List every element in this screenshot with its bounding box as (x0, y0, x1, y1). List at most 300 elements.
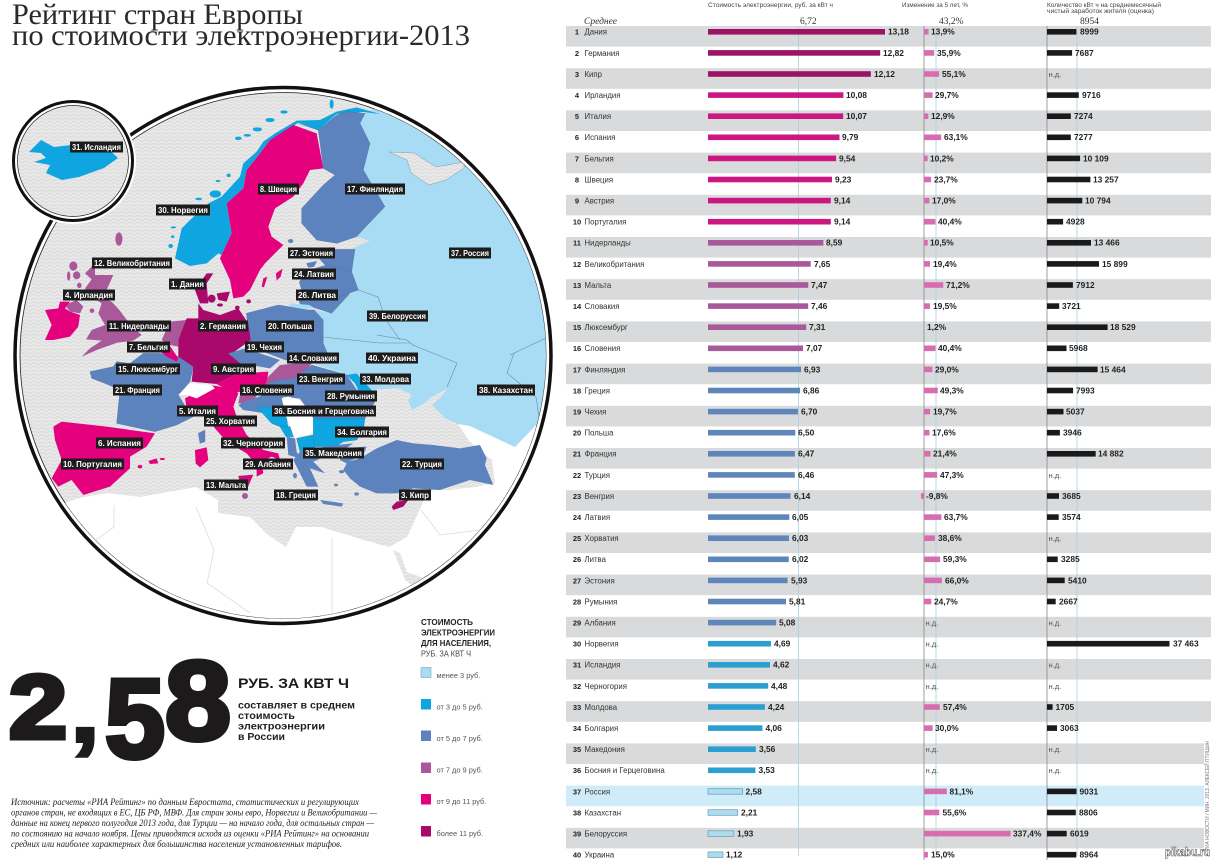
label: 33. Молдова (362, 374, 409, 384)
row 40: 15,0% (931, 850, 955, 860)
row 17: 29,0% (935, 364, 959, 374)
row 30: н.д. (926, 640, 938, 649)
row 17 (573, 364, 1126, 374)
row 38: 38 (573, 808, 581, 817)
row 25: н.д. (1048, 534, 1061, 543)
row 23 (573, 491, 1081, 501)
row 23: 6,14 (794, 491, 811, 501)
row 21 (573, 449, 1124, 459)
legend item: от 5 до 7 руб. (436, 734, 483, 743)
row 20: Польша (584, 429, 614, 438)
row 14: 14 (573, 302, 582, 311)
label: 29. Албания (245, 459, 291, 469)
table header: Изменение за 5 лет, % (902, 2, 968, 9)
table header (584, 1, 1161, 27)
row 34 (573, 723, 1079, 733)
row 8: 8 (575, 175, 579, 184)
row 9: 9 (575, 197, 579, 206)
row 33 (573, 702, 1074, 712)
row 11: 8,59 (826, 238, 843, 248)
label: 38. Казахстан (479, 385, 533, 395)
row 12 (573, 259, 1128, 269)
row 1: Дания (584, 28, 607, 37)
label: 13. Мальта (206, 480, 246, 490)
row 20: 6,50 (798, 428, 815, 438)
row 6: 6 (575, 133, 579, 142)
land borders: Africa (96, 505, 483, 614)
row 14: 19,5% (933, 301, 957, 311)
row 3 (575, 69, 1061, 79)
row 5: 10,07 (846, 111, 867, 121)
label: 32. Черногория (223, 438, 283, 448)
row 12: 15 899 (1102, 259, 1128, 269)
label: 19. Чехия (247, 342, 282, 352)
row 13: 7,47 (811, 280, 828, 290)
row 13: Мальта (584, 281, 612, 290)
row 19: Чехия (584, 407, 606, 416)
row 34: 34 (573, 724, 582, 733)
row 20 (573, 428, 1082, 438)
row 25: 6,03 (792, 533, 809, 543)
sea: White Sea (389, 152, 464, 185)
row 34: 4,06 (766, 723, 782, 733)
row 32: Черногория (584, 682, 627, 691)
row 35: н.д. (1048, 745, 1061, 754)
big number: 2,58: 5 (105, 656, 165, 782)
row 20: 20 (573, 429, 581, 438)
row 38 (573, 807, 1098, 817)
row 27 (573, 575, 1087, 585)
row 25 (573, 533, 1061, 543)
row 24 (573, 512, 1081, 522)
row 31: 4,62 (773, 660, 790, 670)
row 4 (575, 90, 1101, 100)
row 24: 3574 (1062, 512, 1081, 522)
row 15: 15 (573, 323, 581, 332)
country: Austria (217, 372, 268, 393)
row 32: н.д. (926, 682, 938, 691)
country: Croatia (238, 395, 287, 427)
country: Norway (168, 99, 380, 266)
row 22: 22 (573, 471, 581, 480)
row 32: 4,48 (771, 681, 788, 691)
legend item: от 9 до 11 руб. (436, 797, 486, 806)
big number: 2,58 (9, 638, 231, 782)
row 9: 10 794 (1085, 196, 1111, 206)
legend: РУБ. ЗА КВТ Ч (421, 650, 471, 658)
row 10: 40,4% (938, 217, 962, 227)
country: Czechia (228, 348, 280, 368)
row 15: 18 529 (1110, 322, 1136, 332)
row 2 (575, 48, 1094, 58)
legend (421, 617, 495, 838)
big number caption: РУБ. ЗА КВТ Ч (238, 675, 349, 691)
label: 37. Россия (451, 248, 489, 258)
legend: СТОИМОСТЬ (421, 617, 473, 627)
row 30: 4,69 (774, 639, 791, 649)
table header: 8954 (1080, 17, 1099, 27)
row 28 (573, 596, 1078, 606)
row 35: Македония (584, 745, 625, 754)
row 7: 7 (575, 154, 579, 163)
row 17: 6,93 (804, 364, 821, 374)
row 30: 30 (573, 640, 581, 649)
row 21: 14 882 (1098, 449, 1124, 459)
label: 8. Швеция (260, 184, 297, 194)
label: 26. Литва (298, 290, 336, 300)
country: Spain and Portugal (52, 422, 165, 495)
row 16: 7,07 (806, 343, 823, 353)
row 7 (575, 153, 1109, 163)
row 40: 40 (573, 851, 581, 860)
row 33: 57,4% (943, 702, 967, 712)
label: 30. Норвегия (158, 205, 208, 215)
row 25: 25 (573, 534, 581, 543)
row 26: 26 (573, 555, 581, 564)
row 30: 37 463 (1173, 639, 1199, 649)
label: 5. Италия (179, 406, 216, 416)
row 11: 13 466 (1094, 238, 1120, 248)
country: Denmark (195, 273, 251, 310)
legend item: менее 3 руб. (436, 671, 480, 680)
row 3: 55,1% (942, 69, 966, 79)
row 40: 1,12 (726, 850, 743, 860)
label: 22. Турция (402, 459, 442, 469)
row 40: Украина (584, 851, 615, 860)
row 13: 71,2% (946, 280, 970, 290)
label: 20. Польша (268, 321, 312, 331)
row 2: 35,9% (937, 48, 961, 58)
row 11 (573, 238, 1120, 248)
country: Ireland (45, 302, 80, 340)
legend item (421, 794, 486, 806)
row 34: Болгария (584, 724, 618, 733)
row 9: 17,0% (932, 196, 956, 206)
row 32: 32 (573, 682, 581, 691)
row 40: 8964 (1080, 850, 1098, 860)
country: Germany (178, 303, 251, 384)
row 23: -9,8% (926, 491, 948, 501)
country: United Kingdom (65, 261, 142, 357)
country: France (90, 353, 205, 443)
country: Hungary and Romania (263, 365, 375, 418)
label: 36. Босния и Герцеговина (274, 406, 374, 416)
label: 35. Македония (305, 448, 362, 458)
row 37: 81,1% (950, 786, 974, 796)
row 37: Россия (584, 787, 610, 796)
table header: Количество кВт ч на среднемесячный (1047, 1, 1161, 9)
row 8: 13 257 (1093, 174, 1119, 184)
country: Finland (298, 112, 385, 243)
row 39: 39 (573, 829, 581, 838)
big number: 2,58: , (69, 657, 101, 763)
label: 21. Франция (115, 385, 160, 395)
row 4: 10,08 (846, 90, 867, 100)
row 34: 3063 (1060, 723, 1079, 733)
row 1: 13,9% (931, 27, 955, 37)
big number caption (238, 675, 355, 743)
row 18: 18 (573, 386, 581, 395)
row 19: 19 (573, 407, 581, 416)
row 21: 6,47 (798, 449, 815, 459)
row 21: 21 (573, 450, 581, 459)
row 29 (573, 618, 1061, 628)
label: 24. Латвия (294, 269, 334, 279)
row 28: 5,81 (789, 596, 806, 606)
legend: ЭЛЕКТРОЭНЕРГИИ (421, 628, 495, 638)
country: Slovenia (238, 395, 257, 404)
row 13: 13 (573, 281, 581, 290)
row 5: 5 (575, 112, 579, 121)
label: 12. Великобритания (94, 258, 170, 268)
map labels (61, 184, 535, 500)
row 30: Норвегия (584, 640, 619, 649)
row 6: 63,1% (944, 132, 968, 142)
row 4: 29,7% (935, 90, 959, 100)
country: Serbia (282, 397, 313, 438)
row 26: Литва (584, 555, 607, 564)
label: 2. Германия (200, 321, 246, 331)
row 4: Ирландия (584, 91, 620, 100)
country: Slovakia (265, 363, 312, 385)
row 26 (573, 554, 1080, 564)
row 24: 6,05 (792, 512, 809, 522)
row 12: Великобритания (584, 260, 644, 269)
row 3: 3 (575, 70, 579, 79)
row 6: 9,79 (842, 132, 859, 142)
row 18: Греция (584, 386, 610, 395)
row 29: 5,08 (779, 617, 796, 627)
row 6 (575, 132, 1093, 142)
row 27: 66,0% (945, 575, 969, 585)
legend item (421, 762, 483, 774)
row 39: Белоруссия (584, 829, 627, 838)
row 39 (573, 828, 1089, 838)
legend item: более 11 руб. (436, 829, 483, 838)
country: Cyprus (392, 500, 408, 510)
land: Africa and Middle East (65, 424, 537, 618)
row 35: н.д. (926, 745, 938, 754)
row 34: 30,0% (935, 723, 959, 733)
row 23: Венгрия (584, 492, 614, 501)
row 36: 3,53 (758, 765, 775, 775)
row 2: 12,82 (883, 48, 904, 58)
row 32 (573, 681, 1061, 691)
row 23: 3685 (1062, 491, 1081, 501)
country: Malta (242, 493, 248, 499)
row 33: Молдова (584, 703, 618, 712)
row 26: 6,02 (792, 554, 809, 564)
row 2: 7687 (1075, 48, 1094, 58)
label: 25. Хорватия (206, 416, 255, 426)
country: Netherlands (162, 320, 187, 347)
row 27: Эстония (584, 576, 615, 585)
legend item (421, 699, 483, 712)
row 20: 3946 (1063, 428, 1082, 438)
row 27: 5410 (1068, 575, 1087, 585)
row 10 (573, 217, 1085, 227)
row 5: Италия (584, 112, 611, 121)
row 5: 12,9% (931, 111, 955, 121)
credit: РИА НОВОСТИ / МИН. 2013. АЛЕКСЕЙ ПТИЦЫН (1203, 741, 1211, 851)
big number caption: стоимость (238, 710, 296, 722)
row 15 (573, 322, 1136, 332)
big number caption: электроэнергии (238, 720, 325, 732)
row 18: 7993 (1076, 385, 1095, 395)
row 18: 49,3% (940, 385, 964, 395)
row 22: Турция (584, 471, 610, 480)
row 5 (575, 111, 1093, 121)
title (12, 0, 470, 52)
row 15: Люксембург (584, 323, 628, 332)
row 10: 9,14 (834, 217, 851, 227)
row 19: 19,7% (933, 406, 957, 416)
row 16 (573, 343, 1088, 353)
country: Russia, Belarus, Ukraine, Kazakhstan (312, 100, 560, 447)
row 5: 7274 (1074, 111, 1093, 121)
row 26: 59,3% (943, 554, 967, 564)
row 28: Румыния (584, 597, 617, 606)
row 29: 29 (573, 618, 581, 627)
row 14: 7,46 (811, 301, 828, 311)
row 8: 9,23 (835, 174, 852, 184)
row 22 (573, 470, 1061, 480)
row 18: 6,86 (803, 385, 820, 395)
big number caption: составляет в среднем (238, 700, 355, 712)
row 12: 19,4% (933, 259, 957, 269)
label: 9. Австрия (213, 364, 254, 374)
country: Belgium (162, 346, 178, 362)
country: Poland (246, 305, 330, 360)
row 2: 2 (575, 49, 579, 58)
row 8: 23,7% (934, 174, 958, 184)
label: 16. Словения (242, 385, 292, 395)
row 17: 15 464 (1100, 364, 1126, 374)
average and base lines (798, 26, 1077, 860)
country: Albania and Greece (287, 437, 359, 507)
row 10: 10 (573, 218, 581, 227)
source note: данные на конец первого полугодия 2013 года, для Турции — на начало года, для остальных стран — (11, 818, 375, 828)
table rows (573, 27, 1199, 860)
row 22: н.д. (1048, 471, 1061, 480)
row 27: 27 (573, 576, 581, 585)
map: Europe circle (0, 88, 560, 640)
source note: органов стран, не входящих в ЕС, ЦБ РФ, МВФ. Для стран зоны евро, Норвегии и Великобритании — (11, 808, 378, 818)
row 36: н.д. (926, 766, 938, 775)
row 33: 4,24 (768, 702, 785, 712)
Kaliningrad (290, 303, 314, 310)
row 12: 7,65 (814, 259, 831, 269)
label: 18. Греция (276, 490, 316, 500)
source note: по состоянию на начало ноября. Цены приводятся исходя из оценки «РИА Рейтинг» на основании (11, 828, 369, 838)
label: 11. Нидерланды (109, 321, 169, 331)
row 29: н.д. (926, 618, 938, 627)
row 25: 38,6% (938, 533, 962, 543)
Aland islands (288, 239, 293, 243)
row 15: 7,31 (809, 322, 826, 332)
row 29: н.д. (1048, 618, 1061, 627)
legend item: от 7 до 9 руб. (436, 766, 483, 774)
legend item (421, 826, 483, 838)
table header: Стоимость электроэнергии, руб. за кВт ч (708, 1, 833, 9)
row 4: 4 (575, 91, 580, 100)
row 26: 3285 (1061, 554, 1080, 564)
row 16: Словения (584, 344, 620, 353)
country: Sweden (220, 125, 323, 298)
source note (10, 797, 378, 849)
row 13: 7912 (1076, 280, 1095, 290)
row 24: 63,7% (944, 512, 968, 522)
row 6: 7277 (1074, 132, 1093, 142)
inset map: Iceland (10, 98, 136, 224)
label: 14. Словакия (289, 353, 337, 363)
row 39: 6019 (1070, 828, 1089, 838)
row 14: Словакия (584, 302, 619, 311)
row 37 (573, 786, 1098, 796)
label: 17. Финляндия (347, 184, 403, 194)
legend: ДЛЯ НАСЕЛЕНИЯ, (421, 638, 491, 648)
row 13 (573, 280, 1095, 290)
row 23: 23 (573, 492, 581, 501)
table header: 6,72 (800, 17, 817, 27)
row 7: Бельгия (584, 154, 614, 163)
row 16: 40,4% (938, 343, 962, 353)
row 25: Хорватия (584, 534, 619, 543)
row 31: 31 (573, 661, 581, 670)
row 22: 6,46 (798, 470, 815, 480)
row 15: 1,2% (927, 322, 947, 332)
country: Switzerland (178, 383, 215, 398)
label: 10. Португалия (63, 459, 122, 469)
row 39: 337,4% (1013, 828, 1042, 838)
row 17: Финляндия (584, 365, 625, 374)
row 35: 3,56 (759, 744, 776, 754)
big number: 2,58: 8 (165, 638, 231, 764)
sea: Red Sea (393, 550, 424, 585)
big number caption: в России (238, 731, 285, 743)
row 28: 2667 (1059, 596, 1078, 606)
row 7: 9,54 (839, 153, 856, 163)
table header: Среднее (584, 16, 617, 27)
row 2: Германия (584, 49, 619, 58)
row 37: 9031 (1080, 786, 1098, 796)
row 7: 10 109 (1083, 153, 1109, 163)
row 37: 2,58 (746, 786, 762, 796)
row 33: 33 (573, 703, 581, 712)
row 31: Исландия (584, 661, 620, 670)
row 36 (573, 765, 1061, 775)
country: Turkey (340, 440, 493, 493)
row 1 (575, 27, 1099, 37)
row 1: 1 (575, 28, 579, 37)
row 16: 5968 (1069, 343, 1088, 353)
row 36: 36 (573, 766, 581, 775)
row 12: 12 (573, 260, 581, 269)
label: 15. Люксембург (118, 364, 178, 374)
row 38: Казахстан (584, 808, 621, 817)
row 1: 13,18 (888, 27, 909, 37)
country: Italy (185, 385, 280, 477)
label: 1. Дания (171, 279, 204, 289)
source note: средних или наиболее характерных для большинства населения установленных тарифов. (11, 839, 342, 849)
row 1: 8999 (1080, 27, 1099, 37)
country: Bosnia, Montenegro, Macedonia, Bulgaria (257, 407, 365, 452)
row 8: Швеция (584, 175, 613, 184)
source note: Источник: расчеты «РИА Рейтинг» по данным Евростата, статистических и регулирующих (10, 797, 360, 807)
row 3: н.д. (1048, 70, 1061, 79)
row 20: 17,6% (932, 428, 956, 438)
label: 23. Венгрия (299, 374, 343, 384)
